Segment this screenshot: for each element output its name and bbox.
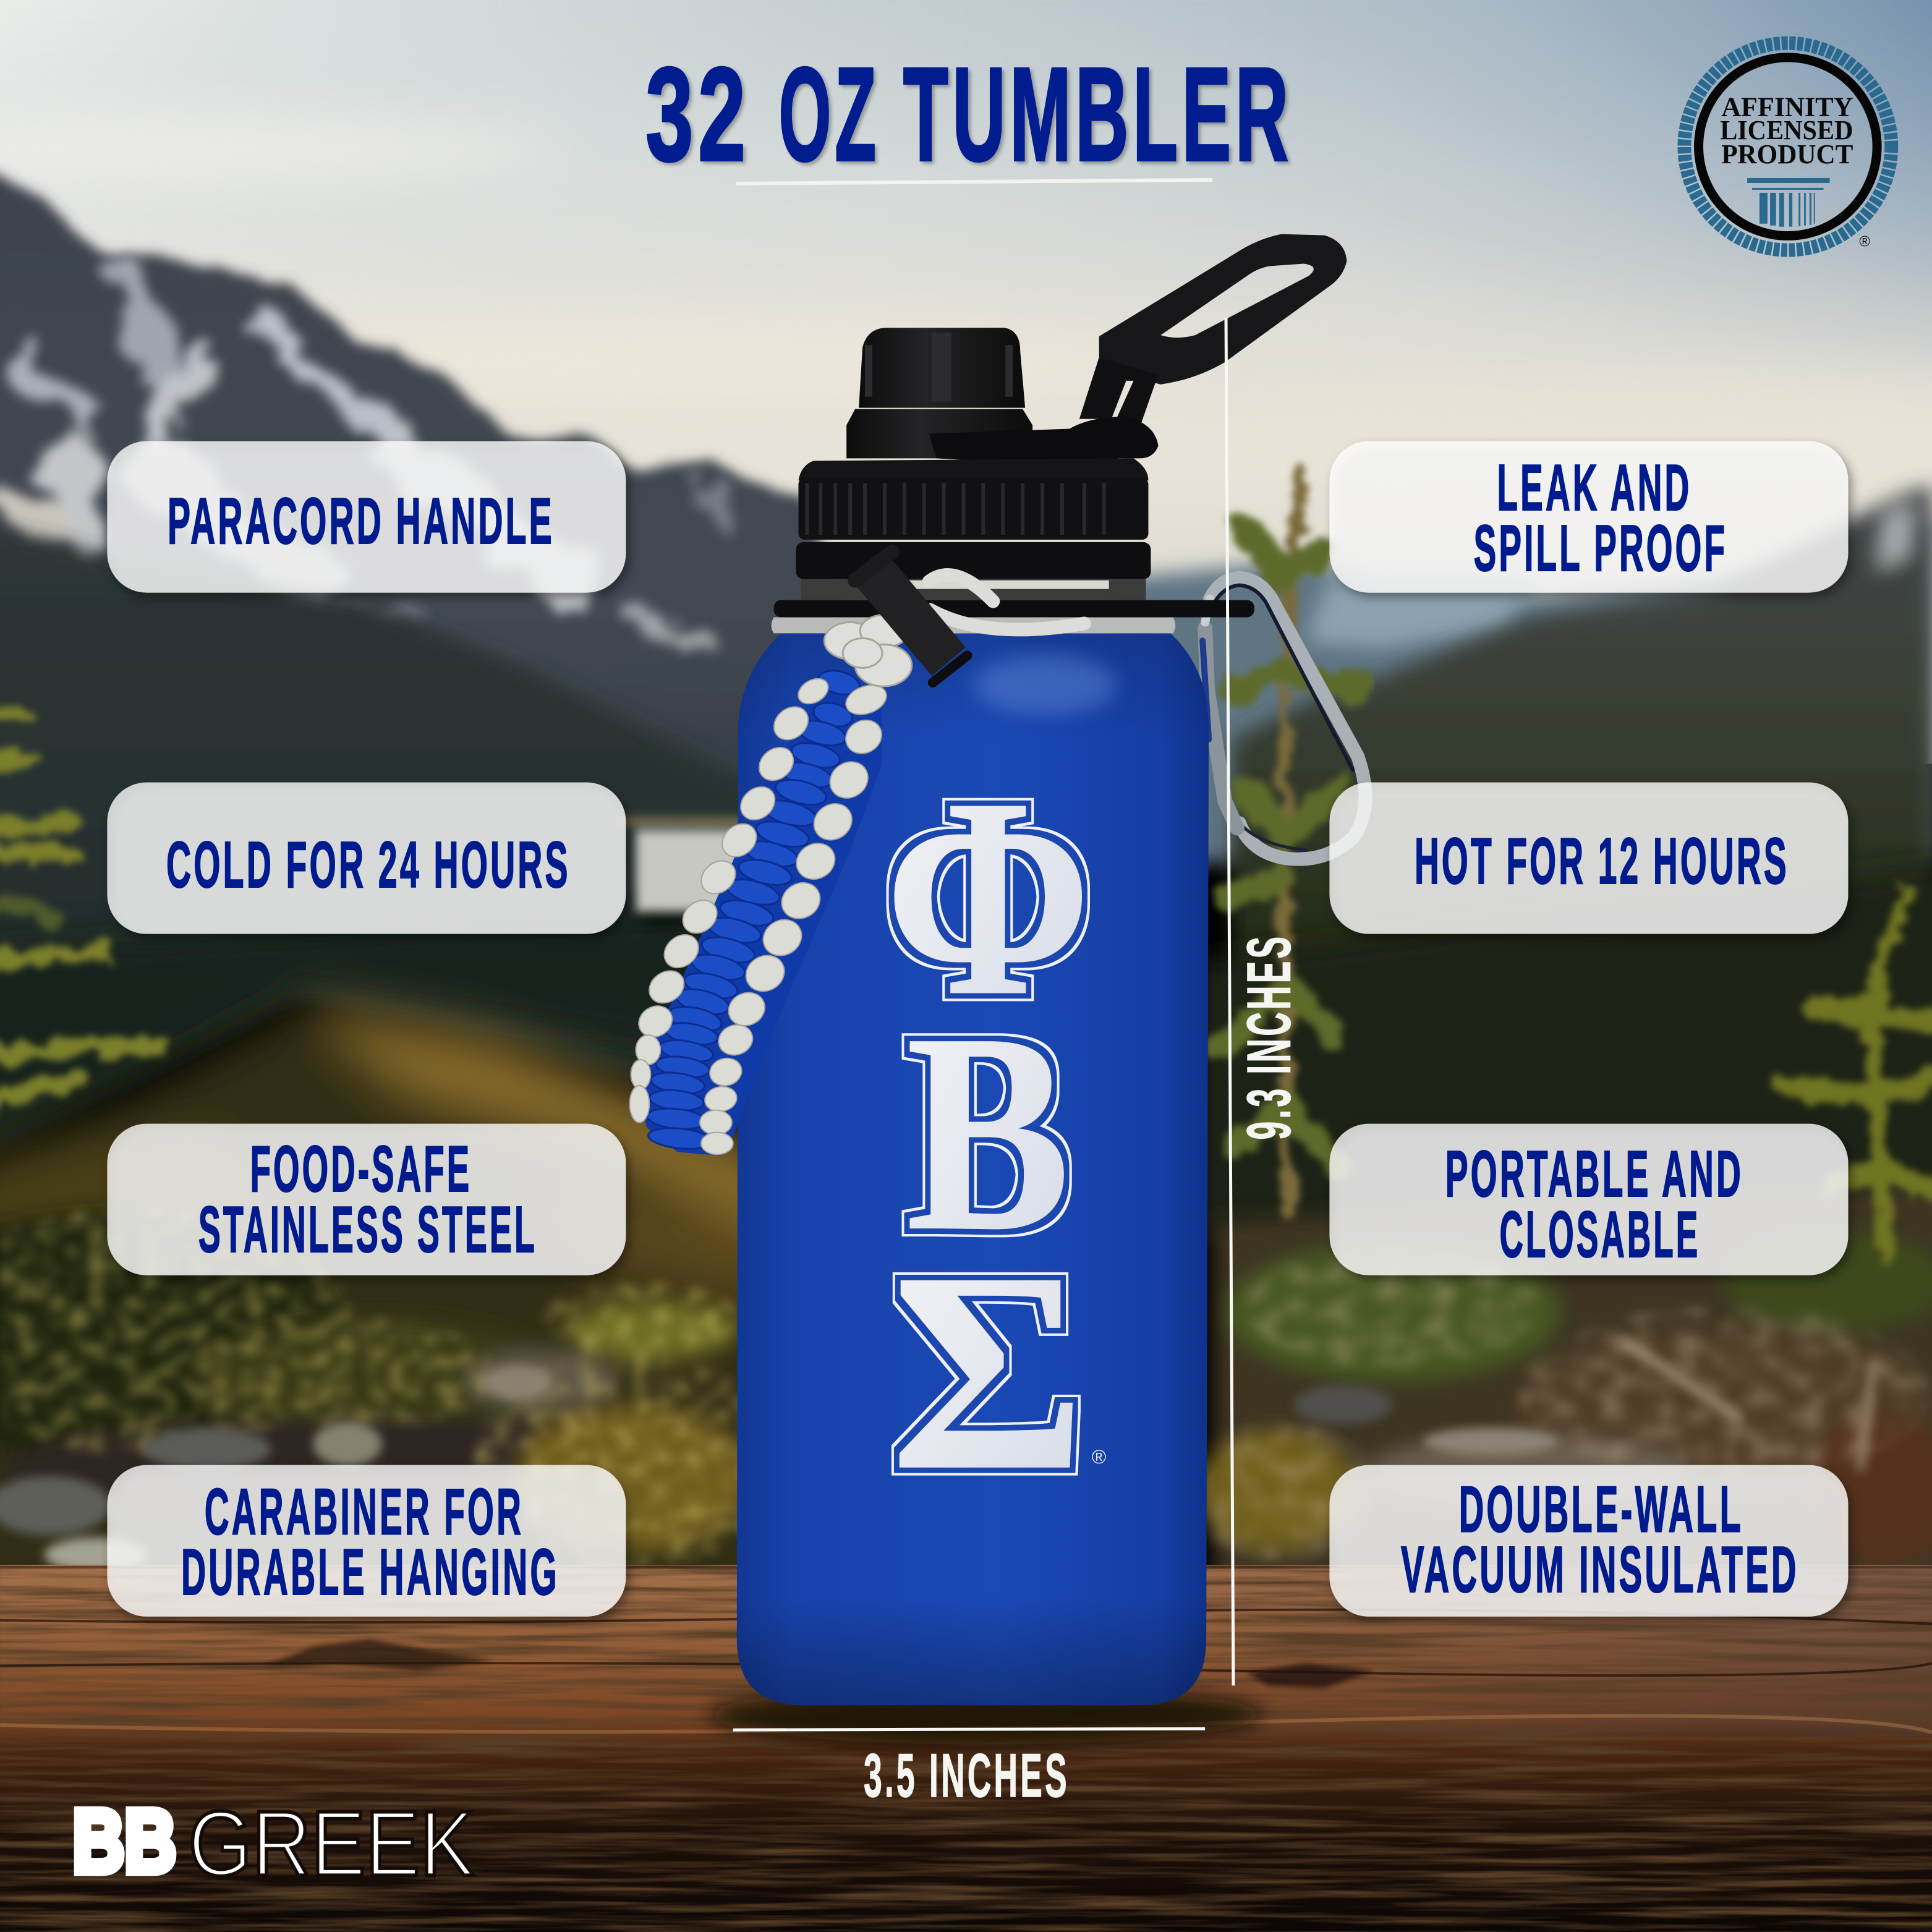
- handle arms: [1079, 357, 1158, 424]
- panel: portable and closable: [1329, 1124, 1848, 1275]
- panel: cold for 24 hours: COLD FOR 24 HOURS: [166, 828, 571, 901]
- registered mark: ®: [1092, 1446, 1106, 1468]
- steel neck: [801, 579, 1146, 600]
- strap core: [634, 675, 882, 1155]
- column icon: [1747, 178, 1830, 227]
- hinge: [929, 417, 1158, 468]
- paracord knot: [824, 615, 912, 686]
- badge text: [1720, 91, 1853, 169]
- flat strap ring: [774, 600, 1254, 617]
- badge text: LICENSED: [1720, 114, 1853, 145]
- sky: [0, 0, 1932, 764]
- panel: double-wall vacuum insulated: [1329, 1465, 1848, 1617]
- cord loop: [929, 575, 1084, 629]
- spout slots: [865, 333, 1013, 402]
- dark forest left: [0, 522, 764, 1146]
- panel: food-safe stainless steel: STAINLESS STEEL: [198, 1193, 537, 1266]
- greek letters: Β: [906, 974, 1071, 1291]
- greek letters: Σ: [890, 1214, 1087, 1530]
- panel: portable and closable: CLOSABLE: [1499, 1198, 1700, 1271]
- title: TUMBLER: [903, 40, 1293, 189]
- bottle body: [737, 633, 1209, 1705]
- handle loop: [1099, 234, 1347, 385]
- panel: food-safe stainless steel: [107, 1124, 626, 1275]
- panel: hot for 12 hours: [1329, 783, 1848, 934]
- lake: [622, 818, 747, 912]
- wood table: [0, 1565, 1932, 1932]
- greek letters: Φ: [885, 739, 1092, 1055]
- forest lower band: [0, 862, 1932, 1232]
- right beads: [700, 680, 890, 1154]
- blue weave: [646, 667, 862, 1152]
- carabiner: [1202, 578, 1365, 859]
- bottle shadow: [709, 1685, 1263, 1745]
- black ring: [1699, 57, 1877, 236]
- height dimension line: [1226, 318, 1233, 1685]
- ribbed collar: [798, 478, 1148, 540]
- logo: bbgreek: [73, 1792, 474, 1895]
- foliage texture left: [0, 1207, 737, 1565]
- panel: food-safe stainless steel: FOOD-SAFE: [250, 1133, 472, 1206]
- badge text: PRODUCT: [1721, 138, 1853, 169]
- panel: paracord handle: [107, 441, 626, 593]
- snow mountain left: [0, 160, 862, 887]
- foliage texture right: [1208, 1258, 1931, 1562]
- spout: [859, 328, 1025, 408]
- title: 32: [645, 40, 751, 189]
- right forest hill: [1232, 484, 1932, 1183]
- height label: 9.3 INCHES: [1235, 934, 1304, 1140]
- logo mark: BB: [73, 1792, 176, 1891]
- tree center right: [1220, 474, 1360, 1207]
- panel: carabiner for durable hanging: DURABLE HANGING: [181, 1536, 560, 1609]
- width label: 3.5 INCHES: [864, 1742, 1070, 1810]
- lid shoulder: [798, 458, 1148, 480]
- distant mountains: [1109, 517, 1932, 862]
- cord band: [772, 617, 1175, 633]
- registered mark: ®: [1859, 234, 1870, 250]
- tree right: [1781, 890, 1932, 1257]
- panel: carabiner for durable hanging: CARABINER FOR: [205, 1475, 524, 1548]
- title: OZ: [779, 40, 880, 189]
- left beads: [629, 674, 833, 1123]
- panel: leak and spill proof: [1329, 441, 1848, 593]
- width dimension line: [733, 1729, 1205, 1730]
- bottle: [629, 234, 1347, 1705]
- lower spout: [846, 409, 1032, 458]
- greek letters: [885, 739, 1092, 1530]
- panel: cold for 24 hours: [107, 783, 626, 934]
- lid: [772, 234, 1347, 633]
- panel: carabiner for durable hanging: [107, 1465, 626, 1617]
- panel: paracord handle: PARACORD HANDLE: [168, 485, 555, 558]
- ground left mass: [0, 1214, 813, 1552]
- title: [645, 40, 1293, 189]
- affinity badge: [1684, 43, 1891, 250]
- cord toggle: [855, 552, 967, 683]
- rocks: [0, 1343, 1873, 1572]
- seal ring: [796, 542, 1151, 579]
- title underline: [736, 180, 1212, 184]
- meadow and ground: [0, 1000, 789, 1602]
- ticked ring: [1684, 43, 1891, 250]
- snow streaks: [0, 277, 721, 650]
- ground right mass: [1195, 1183, 1932, 1602]
- logo wordmark: GREEK: [189, 1792, 474, 1895]
- tree left: [0, 712, 160, 1103]
- panel: leak and spill proof: LEAK AND: [1497, 451, 1692, 524]
- badge text: AFFINITY: [1721, 91, 1853, 122]
- paracord strap: [629, 552, 1084, 1155]
